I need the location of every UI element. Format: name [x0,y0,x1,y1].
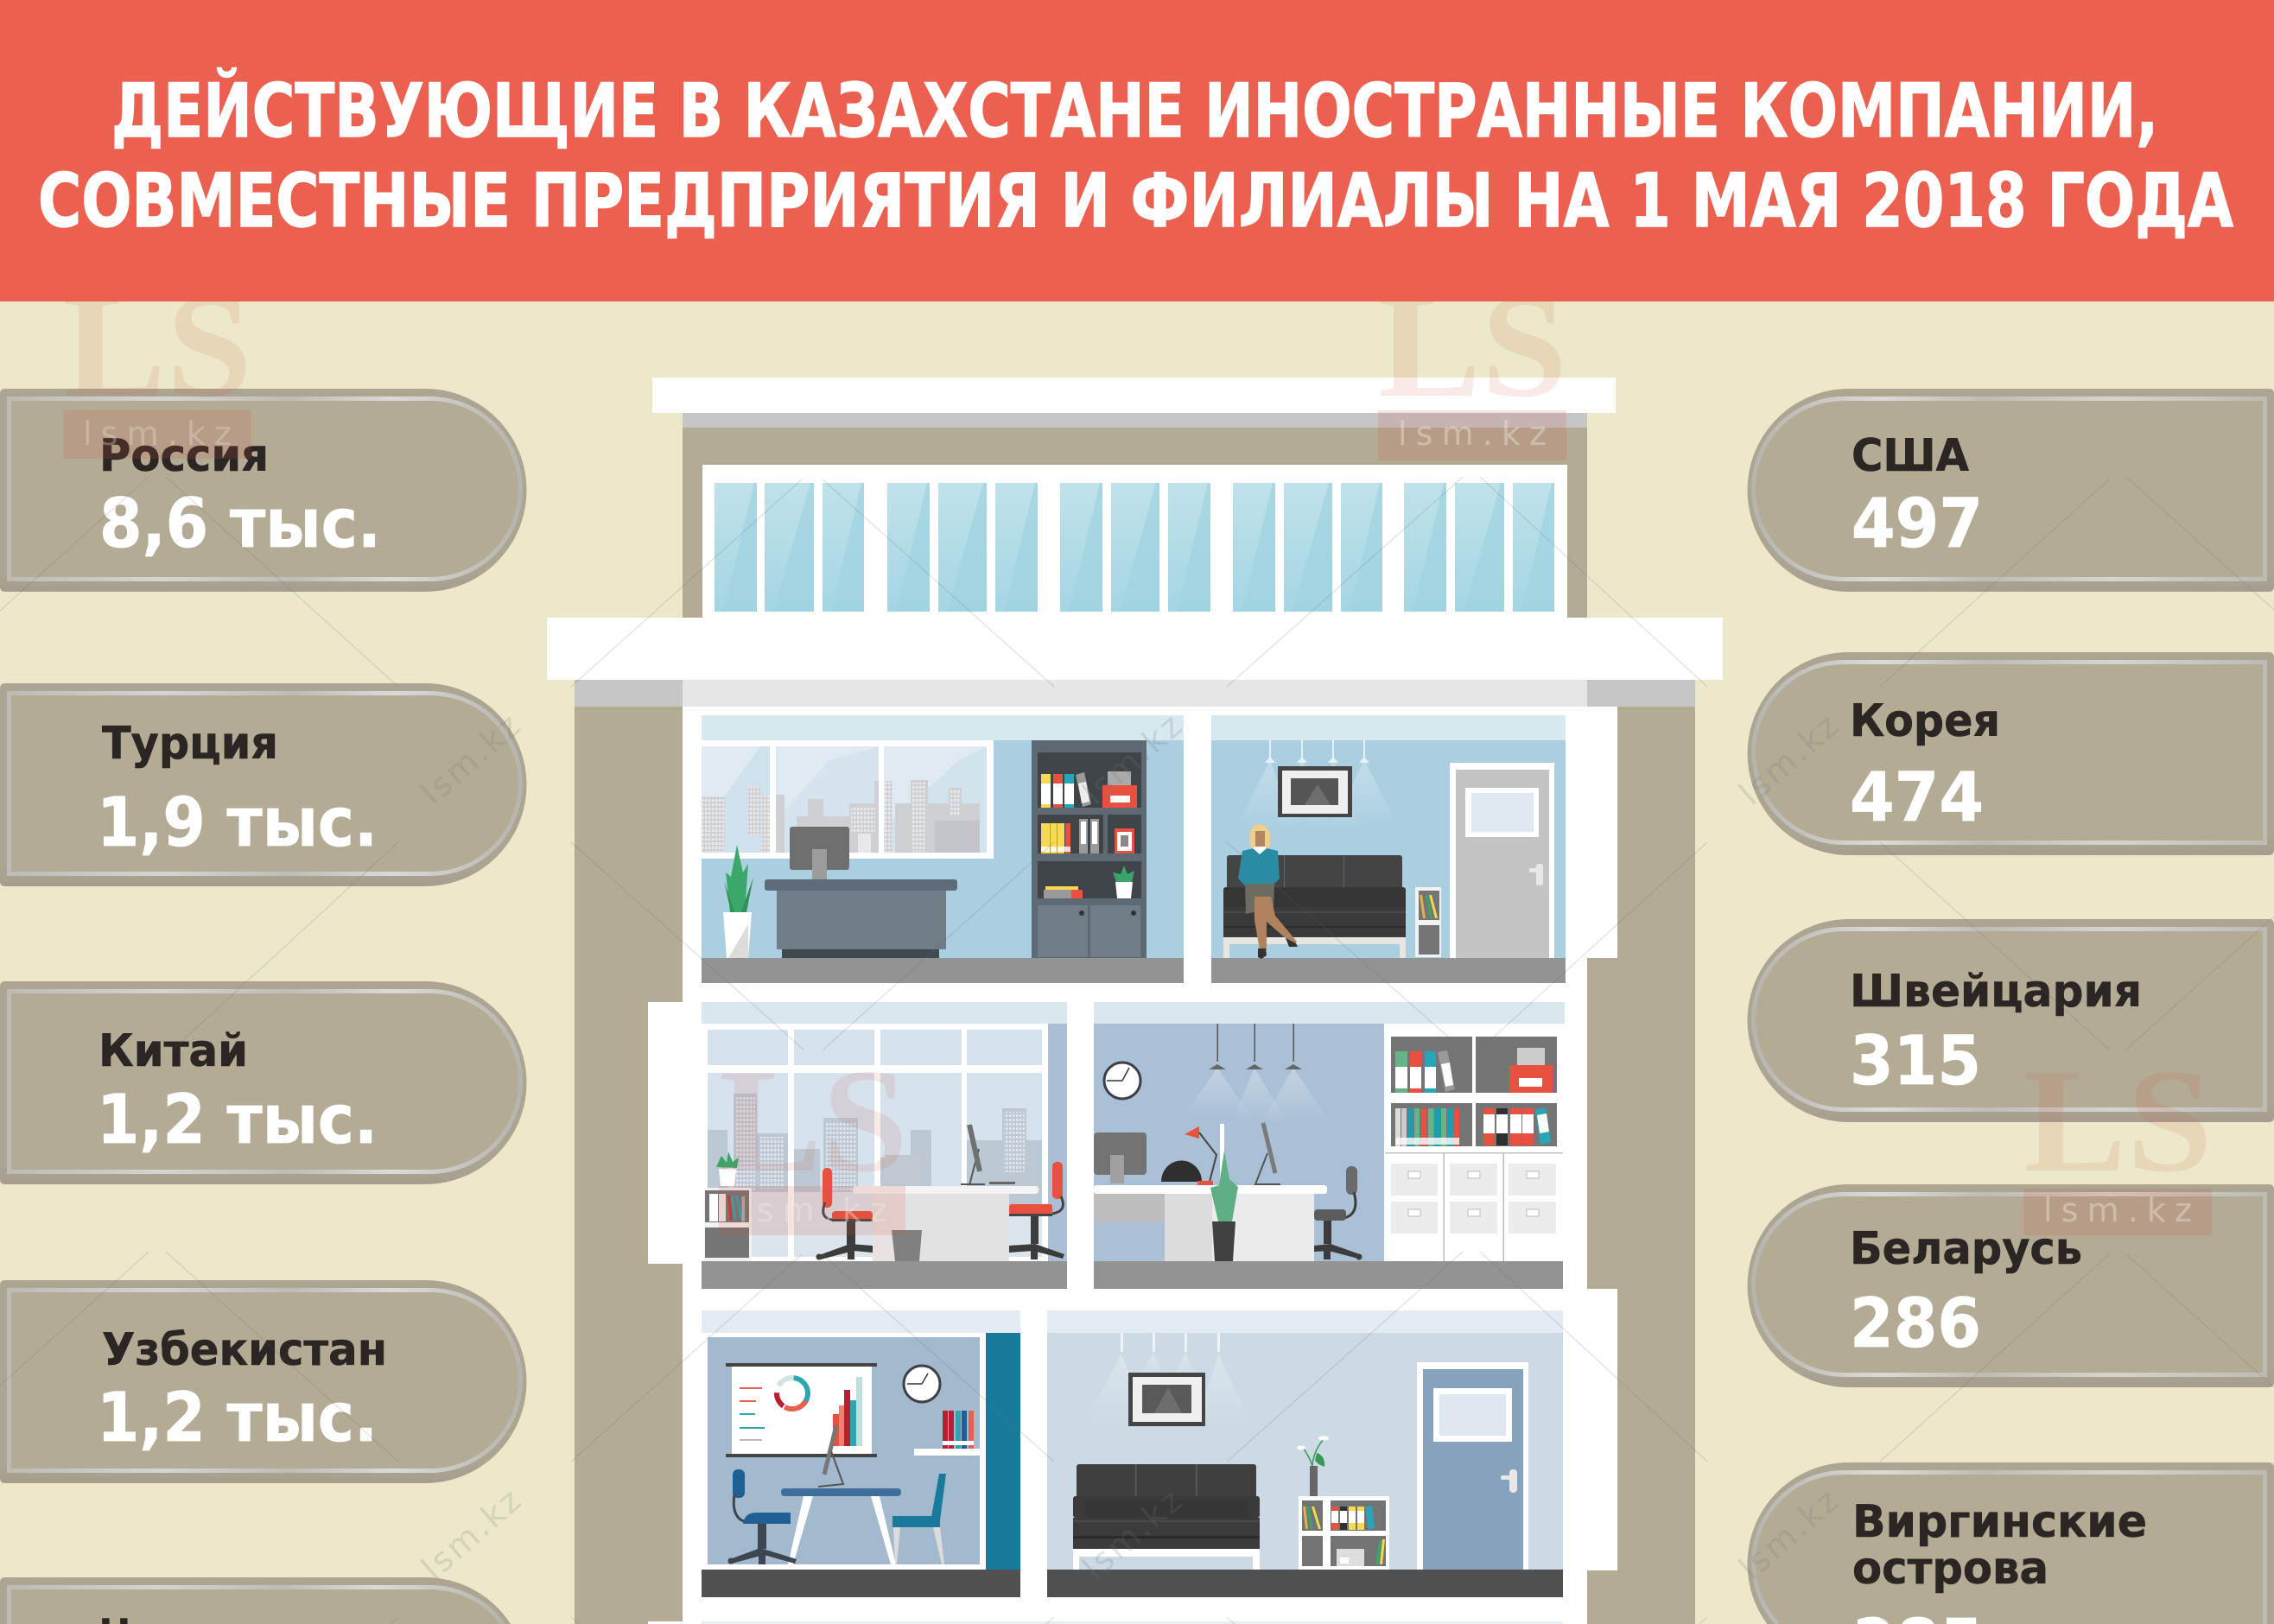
building [547,377,1723,1624]
right pill: Швейцария: Швейцария [1850,966,2142,1018]
left pill: Турция: Турция [102,718,278,770]
top floor wall [683,428,1587,618]
right pill: Беларусь [1747,1184,2274,1387]
window panes [708,1030,1042,1257]
title [38,67,2233,244]
pendant lamps [1182,1024,1331,1123]
table and laptop [781,1425,901,1564]
watermark: LS middle: LS [719,1039,908,1203]
red chairs [816,1162,1064,1259]
roof shadow strip [683,413,1587,428]
teal chair [892,1474,946,1564]
watermark: LS top left: lsm.kz [83,415,232,453]
header banner [0,0,2274,301]
small cabinet [1299,1496,1389,1570]
blue office chair [727,1469,797,1564]
filing cabinets and shelves [1384,1024,1563,1261]
blue door [1417,1362,1528,1570]
right pill: Корея: Корея [1850,695,2000,747]
left pill: Узбекистан: Узбекистан [102,1324,387,1376]
sofa [1223,855,1406,958]
room: reception with seated woman [1211,715,1566,983]
left pill: Узбекистан: 1,2 тыс. [97,1380,378,1457]
painting [1278,766,1352,817]
left pill: Турция [0,683,527,886]
lamps [1235,740,1400,829]
slab shadow [575,680,1695,707]
window with skyline [702,740,994,859]
room: lounge with sofa and blue door [1047,1310,1563,1597]
watermark lattice lines [0,477,2274,1624]
left pill: Узбекистан [0,1280,527,1483]
right pill: Корея: 474 [1850,759,1984,837]
small bookshelf [1415,887,1441,957]
low shelf with plant [704,1151,752,1261]
watermark diagonal lsm.kz labels: lsm.kz [1075,1480,1191,1588]
main tan walls [575,680,1695,1624]
watermark diagonal lsm.kz labels: lsm.kz [1731,705,1848,813]
lamps [1084,1333,1253,1425]
door [1450,763,1554,958]
right pill: Корея [1748,652,2274,855]
desk [853,1125,1039,1261]
presentation screen with charts [726,1363,877,1457]
vase with flowers [1297,1436,1329,1496]
right pill: США [1747,389,2274,592]
wide slab [547,618,1723,680]
watermark: LS middle: lsm.kz [739,1191,887,1229]
clock [1104,1063,1140,1099]
roof top slab [652,377,1616,413]
left pill: Россия [0,389,527,592]
left pill: Россия: Россия [99,430,269,482]
room: office with desk and bookcase [702,715,1184,983]
right pill: Швейцария [1747,919,2274,1122]
watermark: LS top centre: LS [1378,264,1567,428]
sofa [1073,1464,1260,1570]
watermark: LS right: LS [2023,1039,2213,1203]
watermark diagonal lsm.kz labels: lsm.kz [1075,705,1191,813]
left pill: Турция: 1,9 тыс. [97,784,378,862]
plant [723,845,753,958]
right pill: Беларусь: 286 [1850,1285,1981,1363]
top floor windows [715,483,1554,612]
right pill: США: США [1852,430,1969,482]
bookcase [1032,740,1147,958]
right pill: Виргинские острова: острова [1852,1543,2049,1595]
right pill: Швейцария: 315 [1850,1023,1981,1101]
left pill: Китай: 1,2 тыс. [97,1082,378,1159]
desk with monitors and plant [1094,1123,1327,1261]
watermark: LS right: lsm.kz [2043,1191,2192,1229]
white interior [648,707,1617,1624]
woman [1238,824,1298,959]
painting [1128,1373,1205,1426]
watermark diagonal lsm.kz labels: lsm.kz [1731,1480,1848,1588]
left pill: Китай: Китай [98,1025,248,1077]
room: open office with large window [702,1002,1067,1289]
room: meeting room with presentation screen [702,1310,1020,1597]
wall shelf with binders [914,1411,981,1456]
left pill: Китай [0,981,527,1184]
watermark: LS top left: LS [63,264,252,428]
trash bin [892,1230,922,1261]
right pill: Беларусь: Беларусь [1850,1223,2082,1275]
right pill: Виргинские острова: Виргинские [1852,1496,2147,1548]
watermark diagonal lsm.kz labels [413,705,1848,1588]
right pill: США: 497 [1852,485,1983,563]
watermark: LS top centre: lsm.kz [1398,415,1547,453]
right pill: Виргинские острова [1747,1462,2274,1624]
top floor window frame [702,465,1567,618]
grey chair [1314,1166,1362,1259]
clock [904,1366,940,1402]
watermark diagonal lsm.kz labels: lsm.kz [413,705,530,813]
watermark diagonal lsm.kz labels: lsm.kz [414,1480,530,1588]
left pill: cropped fifth country [0,1577,511,1624]
next floor ceiling edge [702,1621,1563,1624]
left pill: Россия: 8,6 тыс. [99,485,381,563]
desk [765,827,957,958]
room: office with filing cabinets [1094,1002,1565,1289]
